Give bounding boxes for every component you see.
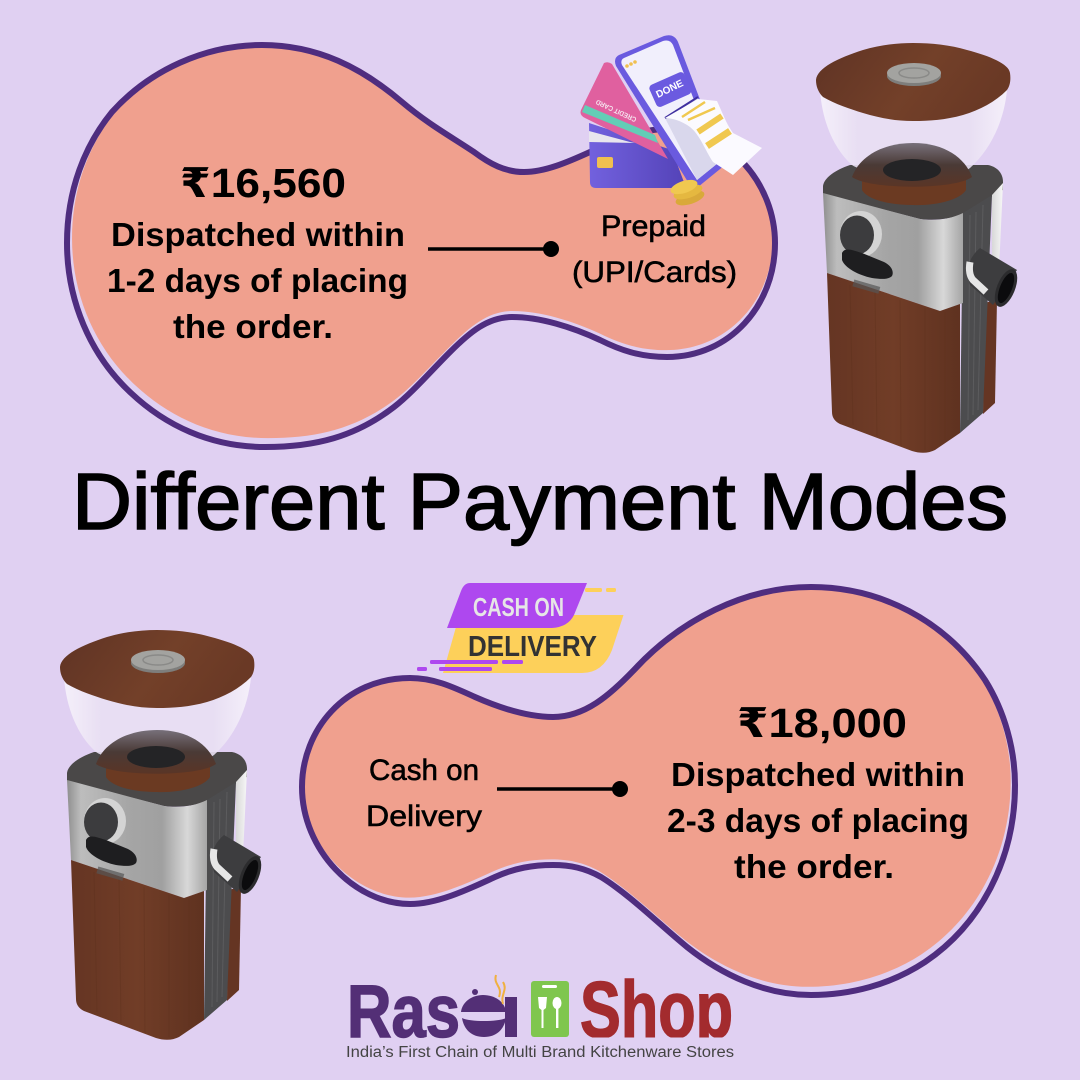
text: prepaid dispatch details: 1-2 days of placing bbox=[107, 262, 408, 299]
connector: cod bbox=[497, 781, 628, 797]
icon: payment cards and phone bbox=[580, 35, 762, 208]
text: cod dispatch details bbox=[667, 756, 969, 885]
icon: payment cards and phone: CREDIT CARD bbox=[595, 98, 638, 123]
text: cod label bbox=[366, 754, 482, 833]
icon: cash on delivery badge: CASH ON bbox=[473, 592, 564, 622]
icon: cash on delivery badge: DELIVERY bbox=[468, 631, 597, 663]
panel: prepaid blob bbox=[67, 45, 775, 447]
text: cod dispatch details: Dispatched within bbox=[671, 756, 965, 793]
text: cod dispatch details: the order. bbox=[734, 848, 894, 885]
product image: grinder bottom left bbox=[60, 630, 266, 1040]
icon: payment cards and phone: DONE bbox=[654, 78, 686, 101]
logo: Rasoi Shop: Shop bbox=[580, 965, 733, 1054]
logo: Rasoi Shop: Ras bbox=[347, 970, 460, 1053]
text: cod dispatch details: 2-3 days of placing bbox=[667, 802, 969, 839]
text: prepaid dispatch details bbox=[107, 216, 408, 345]
panel: cash on delivery blob bbox=[302, 587, 1015, 995]
text: cod price: ₹18,000 bbox=[737, 700, 907, 746]
text: prepaid label: (UPI/Cards) bbox=[572, 256, 737, 289]
text: prepaid label: Prepaid bbox=[601, 210, 706, 243]
text: cod label: Delivery bbox=[366, 800, 482, 833]
connector: prepaid bbox=[428, 241, 559, 257]
text: cod label: Cash on bbox=[369, 754, 479, 787]
text: prepaid price: ₹16,560 bbox=[180, 160, 346, 206]
text: prepaid dispatch details: Dispatched within bbox=[111, 216, 405, 253]
title: Different Payment Modes bbox=[72, 457, 1008, 546]
logo: Rasoi Shop bbox=[348, 974, 734, 1057]
logo: Rasoi Shop: India’s First Chain of Multi Brand Kitchenware Stores bbox=[346, 1044, 734, 1061]
text: prepaid label bbox=[572, 210, 737, 289]
product image: grinder top right bbox=[816, 43, 1022, 453]
icon: cash on delivery badge bbox=[417, 583, 624, 673]
text: prepaid dispatch details: the order. bbox=[173, 308, 333, 345]
